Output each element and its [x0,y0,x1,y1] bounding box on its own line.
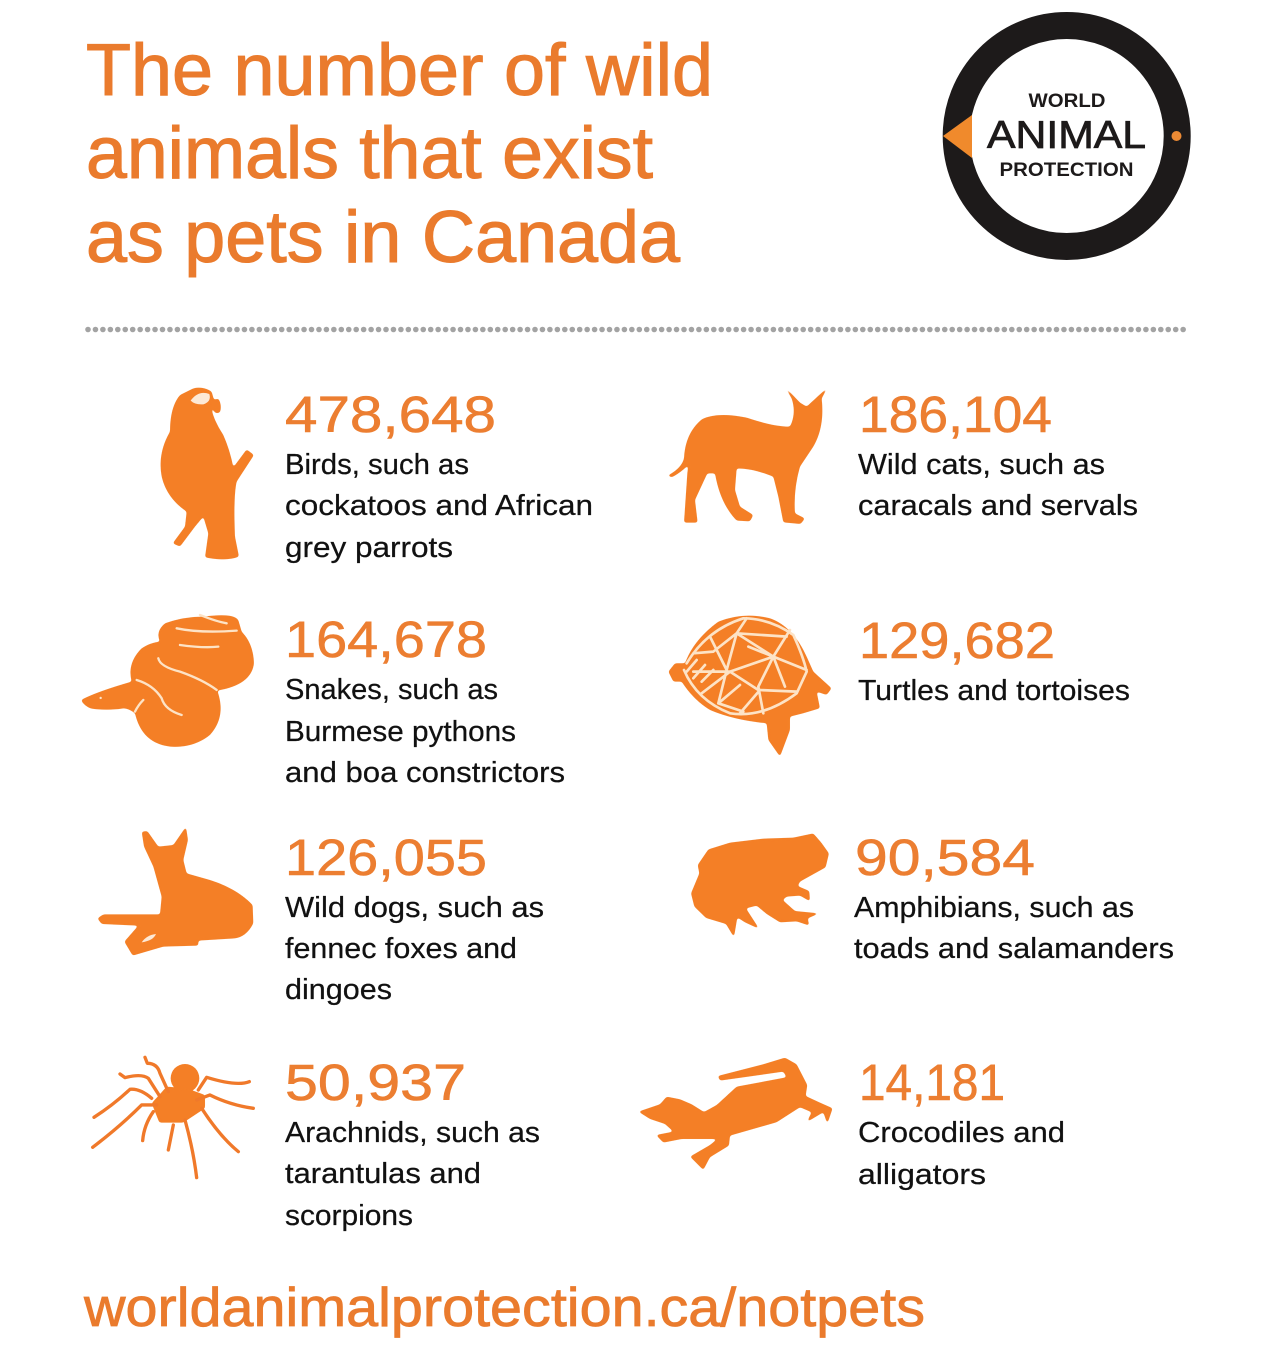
description: Wild dogs, such as [285,892,544,924]
description: Wild cats, such as [858,449,1105,481]
description: tarantulas and [285,1158,481,1190]
description [285,674,565,789]
description: and boa constrictors [285,757,565,789]
description [285,449,593,564]
description [854,892,1174,965]
description: caracals and servals [858,490,1138,522]
description: Arachnids, such as [285,1117,540,1149]
description [285,892,544,1006]
description: dingoes [285,974,392,1006]
stat: birds [161,386,593,564]
website url: worldanimalprotection.ca/notpets [83,1276,925,1338]
number: 126,055 [285,829,487,886]
title: animals that exist [86,113,653,194]
icon: fennec fox [97,827,253,956]
logo: World Animal Protection [943,26,1182,246]
icon: tarantula [93,1057,253,1178]
description [285,1117,540,1232]
description [858,449,1138,522]
title [86,30,713,278]
number: 14,181 [859,1054,1005,1111]
stat: wild dogs [97,827,544,1006]
description [858,1117,1065,1191]
description: grey parrots [285,532,453,564]
logo: World Animal Protection: WORLD [1028,91,1106,112]
stat: wild cats [667,385,1138,524]
description: fennec foxes and [285,933,517,965]
description: Crocodiles and [858,1117,1065,1149]
description: cockatoos and African [285,490,593,522]
description: alligators [858,1159,986,1191]
stat: arachnids [93,1054,540,1232]
description: scorpions [285,1200,413,1232]
icon: tortoise [668,616,832,757]
description: toads and salamanders [854,933,1174,965]
number: 90,584 [855,829,1035,886]
icon: toad [691,833,829,937]
icon: snake [81,615,254,747]
number: 50,937 [285,1054,466,1111]
title: as pets in Canada [86,197,680,278]
description: Snakes, such as [285,674,498,706]
description: Amphibians, such as [854,892,1134,924]
icon: caracal [667,385,828,524]
number: 478,648 [285,386,496,443]
description: Turtles and tortoises [858,675,1130,707]
number: 186,104 [859,386,1052,443]
stat: crocodiles [638,1054,1065,1191]
stat: snakes [81,611,565,789]
stat: turtles [668,612,1130,757]
description: Burmese pythons [285,716,516,748]
icon: parrot [161,388,254,559]
logo: World Animal Protection: ANIMAL [987,114,1146,157]
number: 129,682 [859,612,1055,669]
description: Birds, such as [285,449,469,481]
stat: amphibians [691,829,1174,965]
number: 164,678 [285,611,487,668]
title: The number of wild [86,30,713,111]
icon: crocodile [638,1058,833,1170]
logo: World Animal Protection: PROTECTION [1000,160,1134,181]
